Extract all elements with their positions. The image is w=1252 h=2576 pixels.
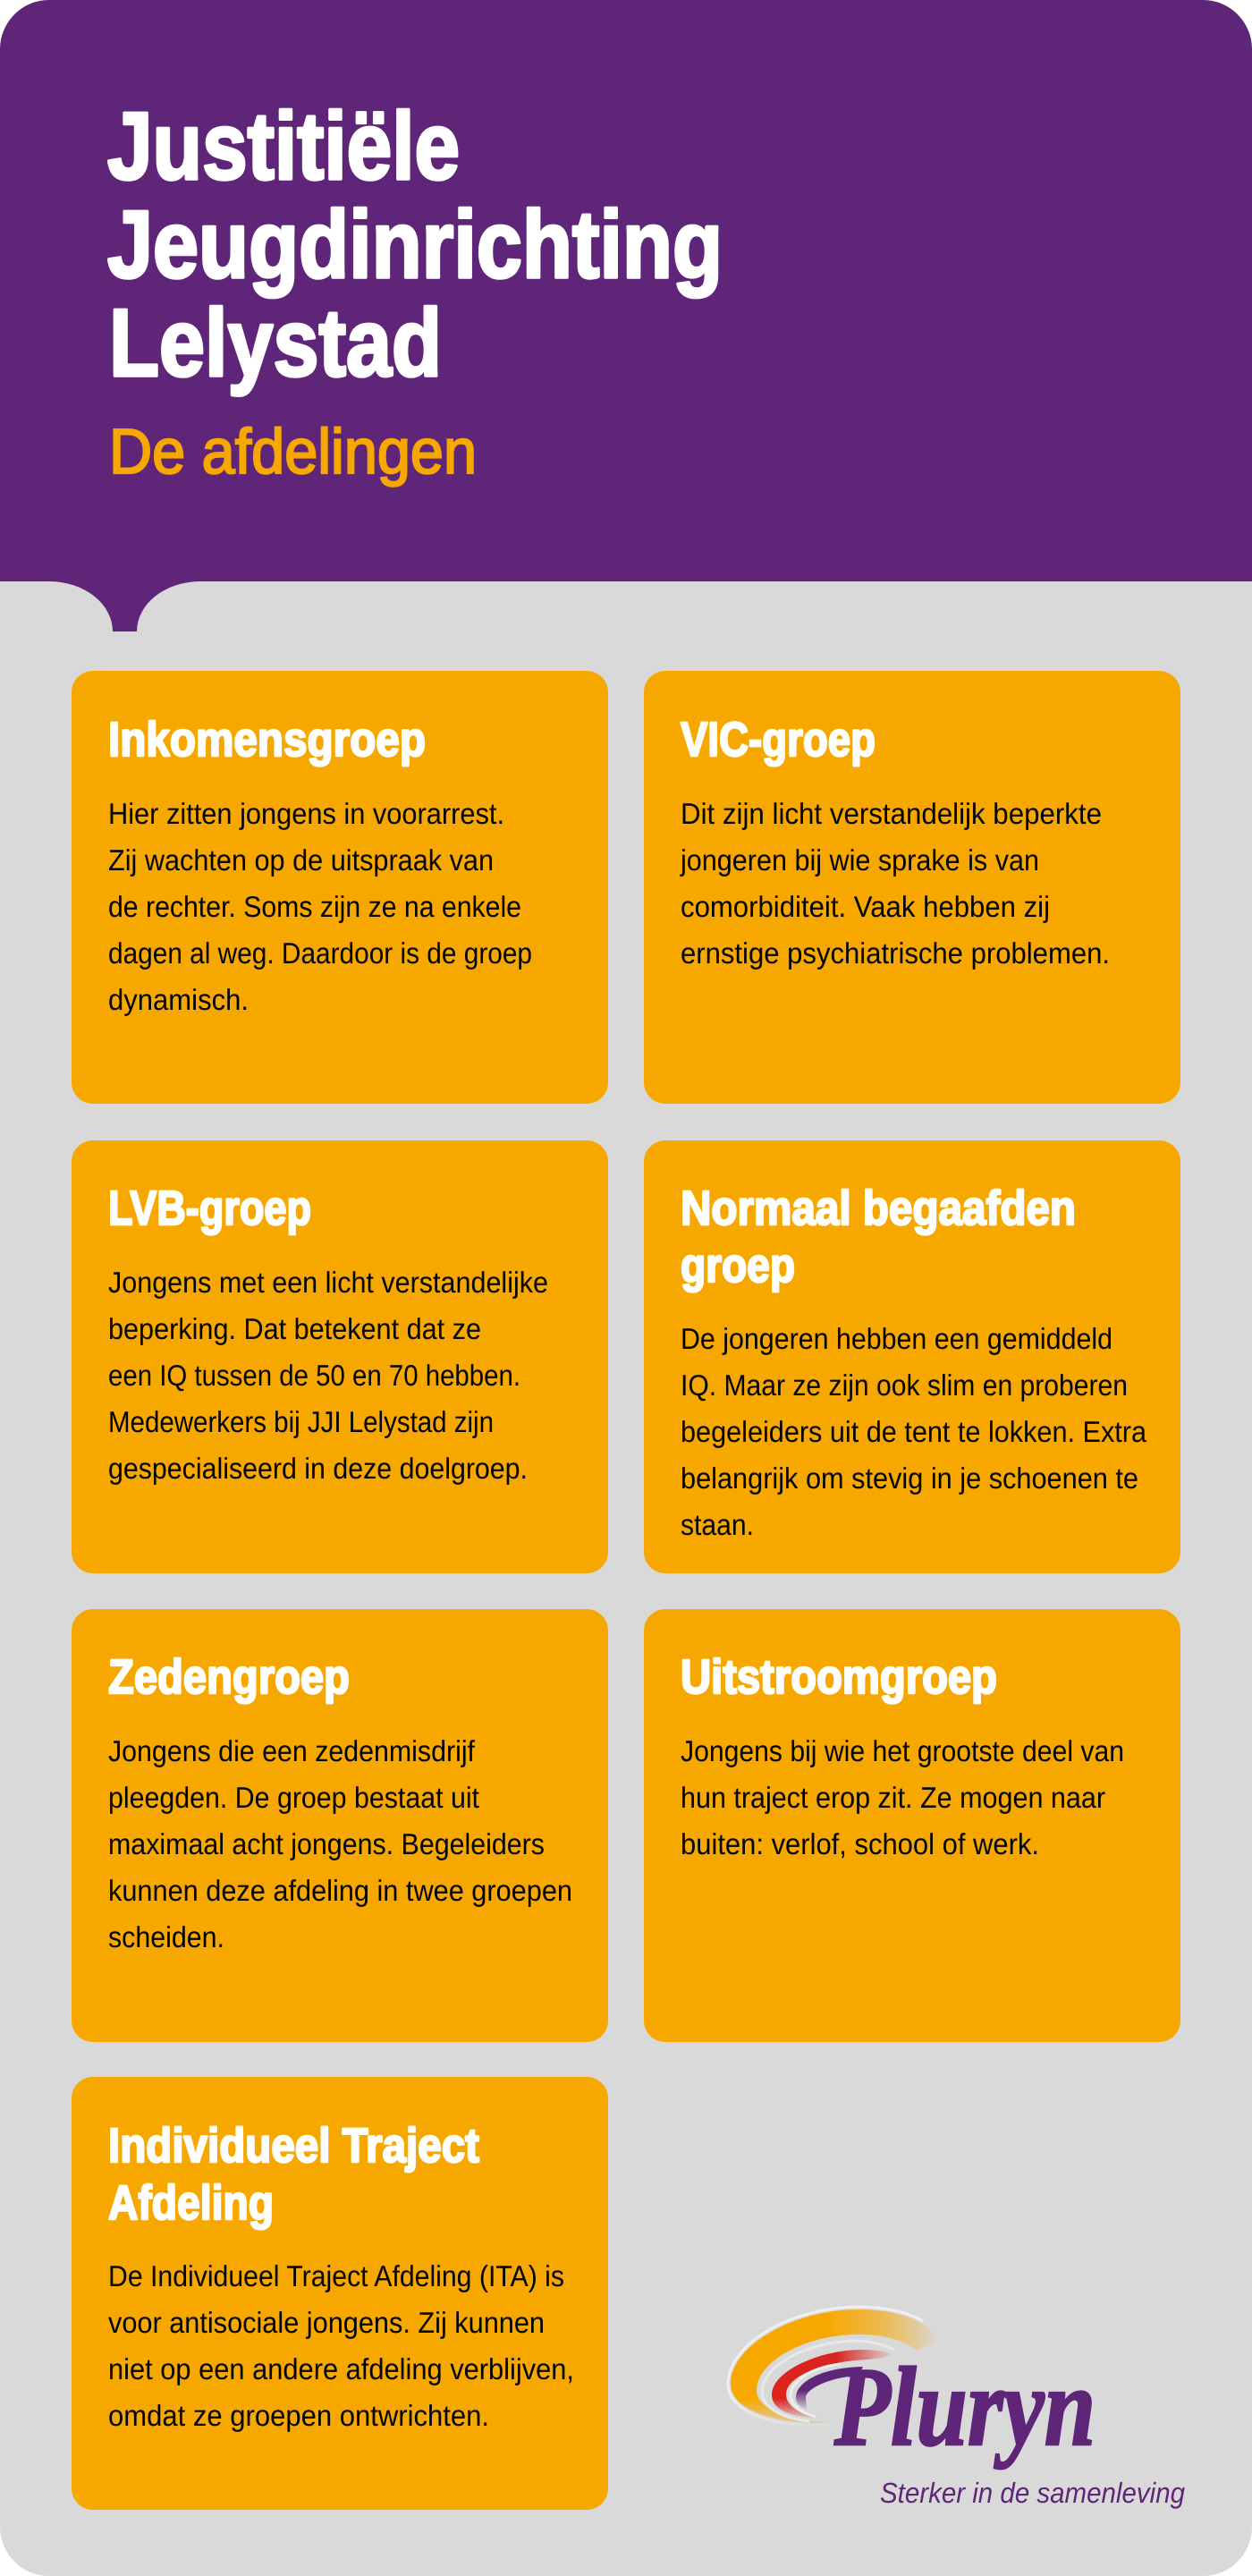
body text xyxy=(680,797,1110,970)
body text: een IQ tussen de 50 en 70 hebben. xyxy=(108,1359,520,1392)
decorative swirl lines xyxy=(762,2341,894,2421)
body text: beperking. Dat betekent dat ze xyxy=(108,1312,481,1345)
body text: omdat ze groepen ontwrichten. xyxy=(108,2399,489,2432)
heading xyxy=(681,1182,1076,1292)
heading: groep xyxy=(681,1239,795,1292)
body text: pleegden. De groep bestaat uit xyxy=(108,1781,479,1814)
icon: red swoosh xyxy=(772,2350,893,2419)
body text: hun traject erop zit. Ze mogen naar xyxy=(681,1781,1105,1814)
heading xyxy=(108,2119,479,2230)
body text: maximaal acht jongens. Begeleiders xyxy=(108,1827,545,1860)
decorative swirl lines xyxy=(791,2364,841,2417)
panel: Inkomensgroep xyxy=(72,671,608,1104)
body text: De Individueel Traject Afdeling (ITA) is xyxy=(108,2259,564,2292)
body text xyxy=(108,797,532,1016)
heading: LVB-groep xyxy=(108,1182,311,1235)
body text: de rechter. Soms zijn ze na enkele xyxy=(108,890,521,923)
panel: Zedengroep xyxy=(72,1609,608,2042)
heading: Uitstroomgroep xyxy=(681,1650,997,1704)
heading: Zedengroep xyxy=(108,1650,350,1704)
icon: purple swoosh xyxy=(796,2367,863,2410)
body text: voor antisociale jongens. Zij kunnen xyxy=(108,2306,545,2339)
title: Justitiële xyxy=(107,92,460,199)
icon: yellow swoosh xyxy=(728,2307,939,2426)
body text: Zij wachten op de uitspraak van xyxy=(108,843,494,877)
heading: Normaal begaafden xyxy=(681,1182,1076,1235)
body text xyxy=(681,1322,1147,1541)
body text: begeleiders uit de tent te lokken. Extra xyxy=(681,1415,1147,1448)
body text: Hier zitten jongens in voorarrest. xyxy=(108,797,504,830)
body text: buiten: verlof, school of werk. xyxy=(681,1827,1039,1860)
body text: scheiden. xyxy=(108,1920,224,1953)
heading: VIC-groep xyxy=(681,713,876,767)
body text: ernstige psychiatrische problemen. xyxy=(681,936,1110,970)
title: Jeugdinrichting xyxy=(107,191,723,298)
body text: dagen al weg. Daardoor is de groep xyxy=(108,936,532,970)
subtitle: De afdelingen xyxy=(109,417,477,487)
panel: Individueel Traject Afdeling xyxy=(72,2077,608,2510)
body text xyxy=(108,1266,548,1485)
banner shape with notch xyxy=(0,0,1252,631)
panel: LVB-groep xyxy=(72,1140,608,1573)
body text xyxy=(108,1734,572,1953)
header banner xyxy=(0,0,1252,631)
body text: Medewerkers bij JJI Lelystad zijn xyxy=(108,1405,494,1438)
body text: Jongens die een zedenmisdrijf xyxy=(108,1734,476,1767)
body text: IQ. Maar ze zijn ook slim en proberen xyxy=(681,1368,1128,1402)
heading: Individueel Traject xyxy=(108,2119,479,2173)
panel: Normaal begaafden groep xyxy=(644,1140,1180,1573)
title xyxy=(107,92,723,396)
panel: Uitstroomgroep xyxy=(644,1609,1180,2042)
panel: VIC-groep xyxy=(644,671,1180,1104)
body text: Dit zijn licht verstandelijk beperkte xyxy=(681,797,1102,830)
body text: jongeren bij wie sprake is van xyxy=(680,843,1039,877)
body text: comorbiditeit. Vaak hebben zij xyxy=(681,890,1050,923)
body text: Jongens met een licht verstandelijke xyxy=(108,1266,548,1299)
heading: Inkomensgroep xyxy=(108,713,426,767)
body text: dynamisch. xyxy=(108,983,249,1016)
heading: Afdeling xyxy=(108,2176,274,2230)
body text: belangrijk om stevig in je schoenen te xyxy=(681,1462,1138,1495)
body text xyxy=(681,1734,1124,1860)
body text: De jongeren hebben een gemiddeld xyxy=(681,1322,1112,1355)
body text: staan. xyxy=(681,1508,754,1541)
body text xyxy=(108,2259,574,2432)
body text: gespecialiseerd in deze doelgroep. xyxy=(108,1452,528,1485)
body text: niet op een andere afdeling verblijven, xyxy=(108,2352,574,2385)
wordmark: Pluryn xyxy=(833,2345,1096,2470)
body text: kunnen deze afdeling in twee groepen xyxy=(108,1874,572,1907)
body text: Jongens bij wie het grootste deel van xyxy=(681,1734,1124,1767)
logo: Pluryn xyxy=(728,2307,1185,2509)
title: Lelystad xyxy=(109,289,442,396)
tagline: Sterker in de samenleving xyxy=(880,2477,1185,2509)
